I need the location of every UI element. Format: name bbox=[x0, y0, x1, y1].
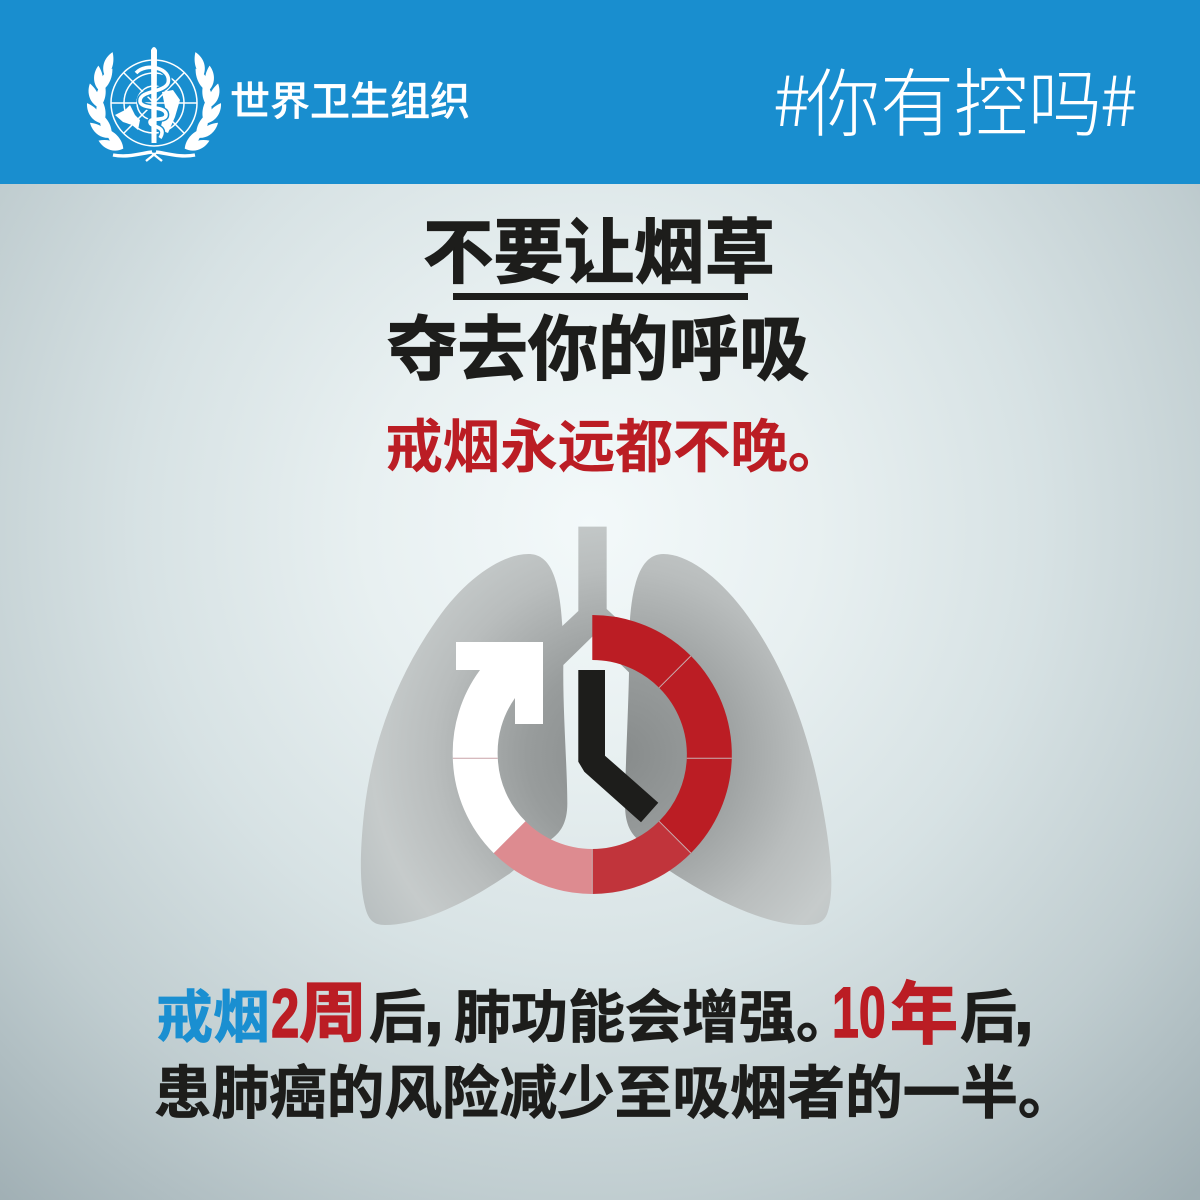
after,: 后 bbox=[369, 986, 426, 1050]
comma second: , bbox=[1013, 963, 1035, 1051]
organisation name: 世界卫生组织 bbox=[230, 80, 470, 124]
quit smoking blue: 戒烟 bbox=[156, 986, 270, 1050]
header band bbox=[0, 0, 1200, 184]
arrow head segment bbox=[453, 642, 543, 758]
bottom text line one bbox=[156, 963, 1035, 1053]
title rule bbox=[453, 293, 748, 300]
bottom text line two: 患肺癌的风险减少至吸烟者的一半。 bbox=[154, 1062, 1076, 1126]
red subtitle: 戒烟永远都不晚。 bbox=[385, 415, 845, 480]
number 10: 10 bbox=[832, 974, 886, 1053]
hashtag left: # bbox=[773, 46, 810, 147]
lungs clock illustration bbox=[360, 526, 832, 925]
ring segments bbox=[453, 615, 732, 894]
clock hands bbox=[578, 670, 658, 822]
campaign words: 你有控吗 bbox=[806, 45, 1102, 152]
comma: , bbox=[423, 963, 445, 1051]
year: 年 bbox=[890, 977, 958, 1053]
lung function sentence: 肺功能会增强。 bbox=[454, 986, 853, 1050]
title line one: 不要让烟草 bbox=[423, 213, 775, 292]
WHO emblem logo bbox=[86, 47, 222, 162]
number 2: 2 bbox=[271, 975, 299, 1052]
title line two: 夺去你的呼吸 bbox=[387, 310, 809, 389]
lungs and trachea bbox=[361, 527, 831, 925]
hashtag right: # bbox=[1100, 46, 1137, 147]
week: 周 bbox=[299, 977, 367, 1050]
after, second: 后 bbox=[960, 986, 1017, 1050]
